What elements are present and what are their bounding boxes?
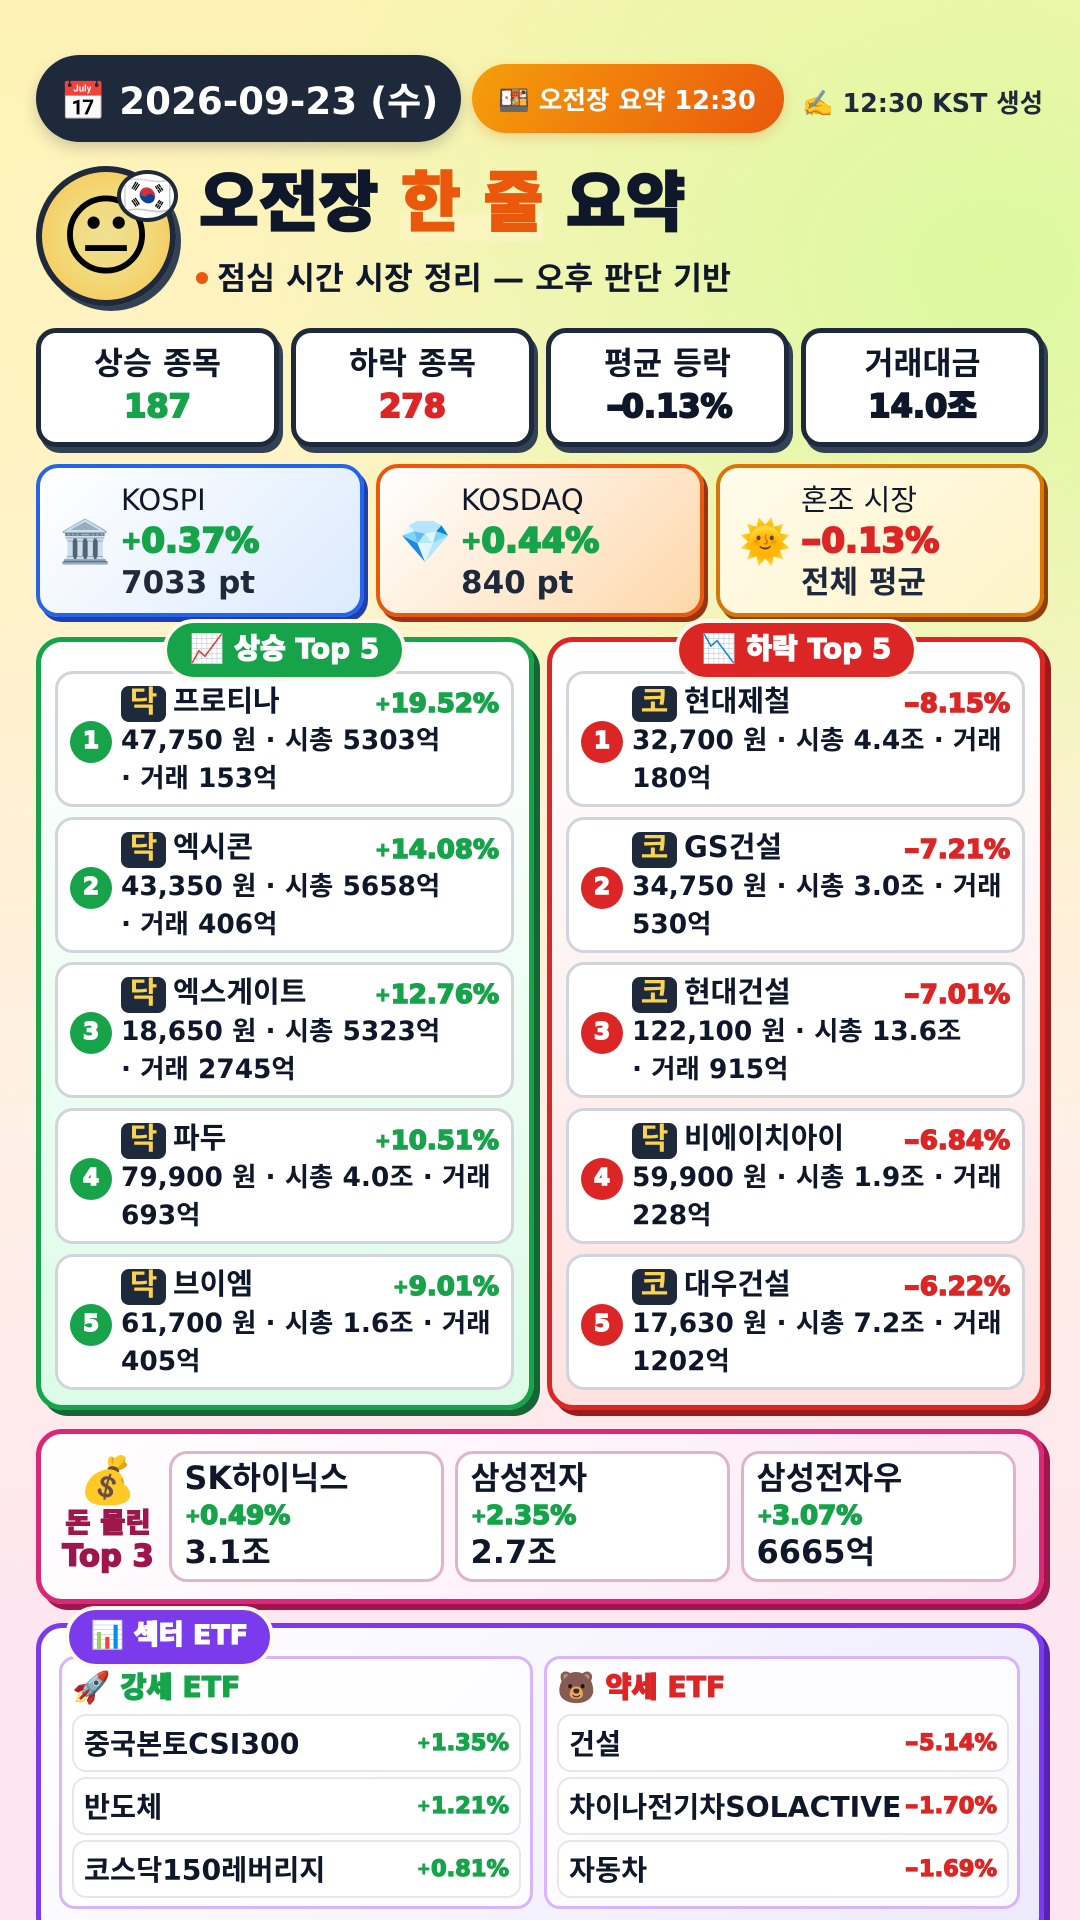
rank: [70, 1304, 112, 1346]
details: 43,350 원 · 시총 5658억: [121, 871, 440, 902]
market badge: [632, 686, 677, 722]
market badge: 코: [641, 831, 668, 866]
rank: 2: [83, 874, 99, 900]
rank: 4: [594, 1165, 610, 1191]
details: · 거래 915억: [632, 1054, 788, 1084]
card: market mood: [716, 464, 1044, 617]
row: autos: [557, 1840, 1009, 1898]
name: 건설: [569, 1728, 621, 1761]
label: 평균 등락: [604, 346, 731, 382]
change: +: [417, 1797, 431, 1815]
mood avatar: [36, 166, 181, 311]
details: [632, 725, 1001, 794]
name: 현대제철: [684, 684, 791, 718]
date pill: 📅 2026-09-23 (수): [60, 79, 438, 123]
details: [632, 1308, 1001, 1376]
value: 14.0조: [868, 387, 977, 425]
row: construction: [557, 1714, 1009, 1772]
icon: sun: 🌞: [739, 517, 791, 566]
subtitle: 점심 시간 시장 정리 — 오후 판단 기반: [217, 261, 731, 297]
change: 1.69%: [919, 1856, 997, 1882]
market badge: 닥: [130, 831, 157, 866]
name: 코스닥150레버리지: [84, 1854, 325, 1887]
value: 2.7조: [470, 1533, 557, 1571]
change: 7.01%: [920, 980, 1010, 1010]
market badge: [121, 686, 166, 722]
market badge: [632, 832, 677, 868]
card: KOSDAQ: [376, 464, 704, 617]
change: 19.52%: [391, 689, 499, 719]
icon: gem: 💎: [399, 517, 451, 566]
rank: [581, 1304, 623, 1346]
value: 3.1조: [184, 1533, 271, 1571]
details: [121, 1308, 490, 1376]
panel: rising top 5: [36, 637, 534, 1410]
panel: falling top 5: [547, 637, 1045, 1410]
icon: money bag: 💰: [79, 1453, 137, 1507]
rank: [581, 867, 623, 909]
stat: falling stocks: [291, 328, 534, 447]
heading pill: sector ETF: 📊 섹터 ETF: [91, 1620, 248, 1651]
name: 엑스게이트: [173, 975, 306, 1009]
label: 하락 종목: [349, 346, 476, 382]
heading: strong ETF: 🚀 강세 ETF: [72, 1670, 240, 1706]
value: 278: [379, 387, 446, 425]
change: 1.70%: [919, 1793, 997, 1819]
item: rank 1: [55, 671, 514, 807]
details: 79,900 원 · 시총 4.0조 · 거래: [121, 1162, 490, 1193]
item: rank 3: [566, 962, 1025, 1098]
name: 프로티나: [173, 684, 280, 718]
stat: average change: [546, 328, 789, 447]
item: rank 1: [566, 671, 1025, 807]
rank: 1: [83, 728, 99, 754]
change: 3.07%: [772, 1501, 862, 1531]
change: 5.14%: [919, 1730, 997, 1756]
row: semiconductors: [72, 1777, 521, 1835]
item: rank 3: [55, 962, 514, 1098]
session badge: [472, 64, 784, 133]
change: -: [904, 1272, 920, 1302]
rank: 5: [83, 1311, 99, 1337]
rank: 1: [594, 728, 610, 754]
card: KOSPI: [36, 464, 364, 617]
name: 대우건설: [684, 1267, 791, 1301]
change: 0.37%: [141, 521, 259, 561]
change: +: [375, 693, 391, 715]
rank: 3: [83, 1019, 99, 1045]
name: 자동차: [569, 1854, 647, 1887]
details: 34,750 원 · 시총 3.0조 · 거래: [632, 871, 1001, 902]
label: KOSPI: [121, 483, 206, 517]
date pill: [36, 55, 461, 142]
details: [632, 871, 1001, 940]
market badge: 닥: [130, 1122, 157, 1157]
name: 삼성전자: [470, 1461, 587, 1497]
change: -: [904, 1126, 920, 1156]
icon: neutral face: [36, 166, 176, 306]
label: 거래대금: [865, 346, 980, 382]
change: -: [905, 1793, 919, 1819]
rank: 3: [594, 1019, 610, 1045]
title: 오전장 한 줄 요약: [199, 166, 686, 241]
item: rank 2: [566, 817, 1025, 953]
details: 180억: [632, 762, 711, 794]
change: 10.51%: [391, 1126, 499, 1156]
cell: Samsung Electronics: [455, 1451, 730, 1582]
change: 8.15%: [920, 689, 1010, 719]
details: [121, 1162, 490, 1230]
label: 혼조 시장: [801, 483, 917, 517]
cell: SK hynix: [169, 1451, 444, 1582]
change: 1.35%: [431, 1730, 509, 1756]
name: 반도체: [84, 1791, 162, 1824]
market badge: 코: [641, 685, 668, 720]
heading pill: sector ETF: [69, 1610, 270, 1664]
details: 47,750 원 · 시총 5303억: [121, 725, 440, 756]
icon: Korean flag: 🇰🇷: [123, 173, 172, 219]
average: 전체 평균: [801, 565, 926, 601]
rank: [70, 721, 112, 763]
change: 6.84%: [920, 1126, 1010, 1156]
name: GS건설: [684, 830, 782, 864]
panel: money flow top 3: [36, 1429, 1044, 1604]
market badge: 코: [641, 976, 668, 1011]
rank: [70, 1158, 112, 1200]
value: -: [607, 387, 626, 425]
item: rank 5: [55, 1254, 514, 1390]
name: 비에이치아이: [684, 1121, 844, 1155]
details: 59,900 원 · 시총 1.9조 · 거래: [632, 1162, 1001, 1193]
rank: [581, 1012, 623, 1054]
points: 840 pt: [461, 565, 574, 601]
change: 0.44%: [481, 521, 599, 561]
change: 7.21%: [920, 835, 1010, 865]
rank: [581, 1158, 623, 1200]
details: 1202억: [632, 1346, 730, 1376]
heading: weak ETF: 🐻 약세 ETF: [557, 1670, 725, 1706]
market badge: 닥: [130, 1268, 157, 1303]
details: 405억: [121, 1346, 200, 1376]
icon: bank: 🏛️: [59, 517, 111, 566]
market badge: 닥: [130, 976, 157, 1011]
details: [632, 1016, 961, 1084]
item: rank 5: [566, 1254, 1025, 1390]
sub-panel: strong ETF: [59, 1656, 533, 1909]
value: 187: [124, 387, 191, 425]
heading pill: falling: [679, 623, 914, 677]
name: 삼성전자우: [756, 1461, 902, 1497]
market badge: 코: [641, 1268, 668, 1303]
details: · 거래 2745억: [121, 1054, 296, 1084]
heading pill: rising: 📈 상승 Top 5: [190, 632, 379, 665]
market badge: [121, 1123, 166, 1159]
change: 14.08%: [391, 835, 499, 865]
label: 상승 종목: [94, 346, 221, 382]
item: rank 4: [566, 1108, 1025, 1244]
session badge: 🍱 오전장 요약 12:30: [498, 86, 756, 116]
details: [121, 1016, 440, 1084]
market badge: [121, 977, 166, 1013]
details: · 거래 153억: [121, 762, 277, 794]
icon: neutral face: 😐: [60, 184, 152, 288]
value: 6665억: [756, 1533, 875, 1571]
name: 현대건설: [684, 975, 791, 1009]
change: 0.81%: [431, 1856, 509, 1882]
change: +: [121, 527, 142, 555]
stat: turnover: [801, 328, 1044, 447]
change: -: [905, 1856, 919, 1882]
change: +: [375, 1130, 391, 1152]
change: +: [756, 1505, 772, 1527]
heading pill: rising: [167, 623, 402, 677]
name: 차이나전기차SOLACTIVE: [569, 1791, 901, 1824]
row: KOSDAQ150 leverage: [72, 1840, 521, 1898]
change: -: [905, 1730, 919, 1756]
name: 브이엠: [173, 1267, 253, 1301]
market badge: [121, 1269, 166, 1305]
value: 0.13%: [622, 387, 733, 425]
change: +: [393, 1276, 409, 1298]
generated time: ✍️ 12:30 KST 생성: [802, 88, 1043, 118]
market badge: 닥: [130, 685, 157, 720]
row: China EV: [557, 1777, 1009, 1835]
stat: rising stocks: [36, 328, 279, 447]
change: +: [470, 1505, 486, 1527]
heading: money flow: 돈 몰린: [65, 1507, 151, 1539]
change: +: [417, 1734, 431, 1752]
change: -: [904, 835, 920, 865]
rank: 5: [594, 1311, 610, 1337]
change: 9.01%: [409, 1272, 499, 1302]
change: -: [904, 980, 920, 1010]
rank: 4: [83, 1165, 99, 1191]
rank: 2: [594, 874, 610, 900]
panel: sector ETF: [36, 1623, 1044, 1920]
details: [121, 725, 440, 794]
change: 0.49%: [200, 1501, 290, 1531]
sub-panel: weak ETF: [544, 1656, 1020, 1909]
change: +: [184, 1505, 200, 1527]
details: [632, 1162, 1001, 1230]
change: 0.13%: [821, 521, 939, 561]
heading: top 3: Top 3: [62, 1539, 154, 1574]
details: 693억: [121, 1200, 200, 1230]
details: 228억: [632, 1200, 711, 1230]
market badge: 닥: [641, 1122, 668, 1157]
change: 2.35%: [486, 1501, 576, 1531]
change: 1.21%: [431, 1793, 509, 1819]
name: 파두: [173, 1121, 226, 1155]
change: -: [801, 521, 821, 561]
heading pill: falling: 📉 하락 Top 5: [702, 632, 891, 665]
change: 12.76%: [391, 980, 499, 1010]
details: 18,650 원 · 시총 5323억: [121, 1016, 440, 1047]
rank: [70, 867, 112, 909]
change: 6.22%: [920, 1272, 1010, 1302]
details: 122,100 원 · 시총 13.6조: [632, 1016, 961, 1047]
market badge: [632, 1123, 677, 1159]
name: 엑시콘: [173, 830, 253, 864]
market badge: [121, 832, 166, 868]
details: 61,700 원 · 시총 1.6조 · 거래: [121, 1308, 490, 1339]
details: [121, 871, 440, 940]
name: SK하이닉스: [184, 1461, 348, 1497]
name: 중국본토CSI300: [84, 1728, 299, 1761]
change: +: [375, 839, 391, 861]
cell: Samsung Electronics preferred: [741, 1451, 1016, 1582]
row: CSI300: [72, 1714, 521, 1772]
rank: [581, 721, 623, 763]
market badge: [632, 1269, 677, 1305]
change: +: [461, 527, 482, 555]
details: · 거래 406억: [121, 908, 277, 940]
rank: [70, 1012, 112, 1054]
details: 32,700 원 · 시총 4.4조 · 거래: [632, 725, 1001, 756]
item: rank 2: [55, 817, 514, 953]
points: 7033 pt: [121, 565, 255, 601]
label: KOSDAQ: [461, 483, 584, 517]
market badge: [632, 977, 677, 1013]
details: 17,630 원 · 시총 7.2조 · 거래: [632, 1308, 1001, 1339]
change: -: [904, 689, 920, 719]
item: rank 4: [55, 1108, 514, 1244]
details: 530억: [632, 908, 711, 940]
change: +: [417, 1860, 431, 1878]
change: +: [375, 984, 391, 1006]
